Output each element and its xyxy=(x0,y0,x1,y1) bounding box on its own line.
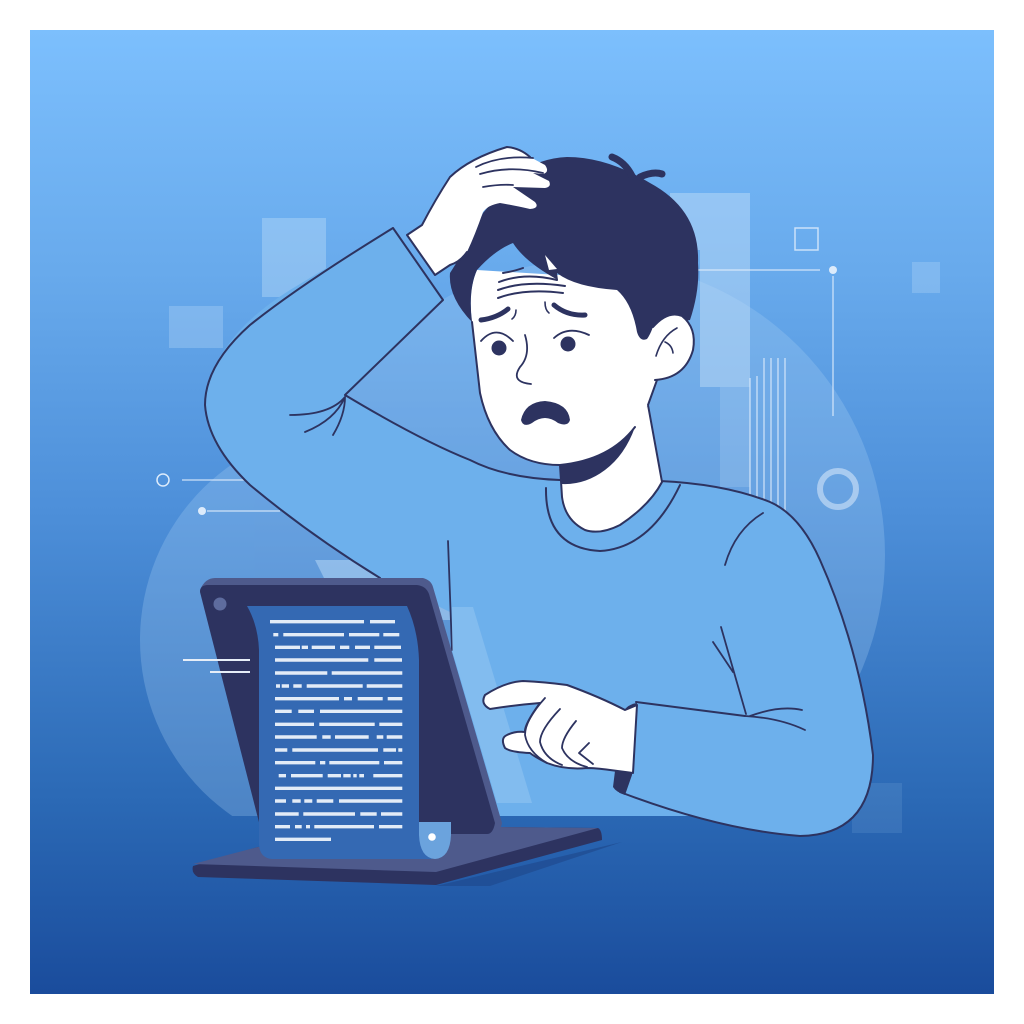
person xyxy=(205,147,873,836)
hair xyxy=(450,157,698,340)
face xyxy=(471,270,665,465)
forehead wrinkles xyxy=(498,268,565,298)
pointing hand xyxy=(483,681,637,795)
motion lines xyxy=(183,660,250,672)
document scroll xyxy=(247,606,451,859)
brow creases xyxy=(512,302,549,319)
mouth xyxy=(521,401,570,425)
scroll curl xyxy=(419,822,451,859)
background shapes xyxy=(140,193,940,854)
document text lines xyxy=(270,622,402,839)
tablet screen frame xyxy=(200,578,502,834)
tablet base xyxy=(193,827,602,885)
neck and collar xyxy=(546,405,680,551)
tablet camera xyxy=(214,598,226,610)
nose xyxy=(517,335,531,384)
tablet base shadow xyxy=(436,842,622,886)
eyebrows xyxy=(481,305,585,320)
tablet xyxy=(193,578,602,885)
sweater torso and arms xyxy=(205,228,873,836)
ear xyxy=(645,314,694,380)
eyes xyxy=(481,331,589,356)
dark cuff xyxy=(613,703,637,795)
raised hand xyxy=(407,147,550,275)
light panel over sweater xyxy=(452,607,532,803)
decorative tech lines and markers xyxy=(157,228,856,515)
neck shadow xyxy=(560,427,635,484)
